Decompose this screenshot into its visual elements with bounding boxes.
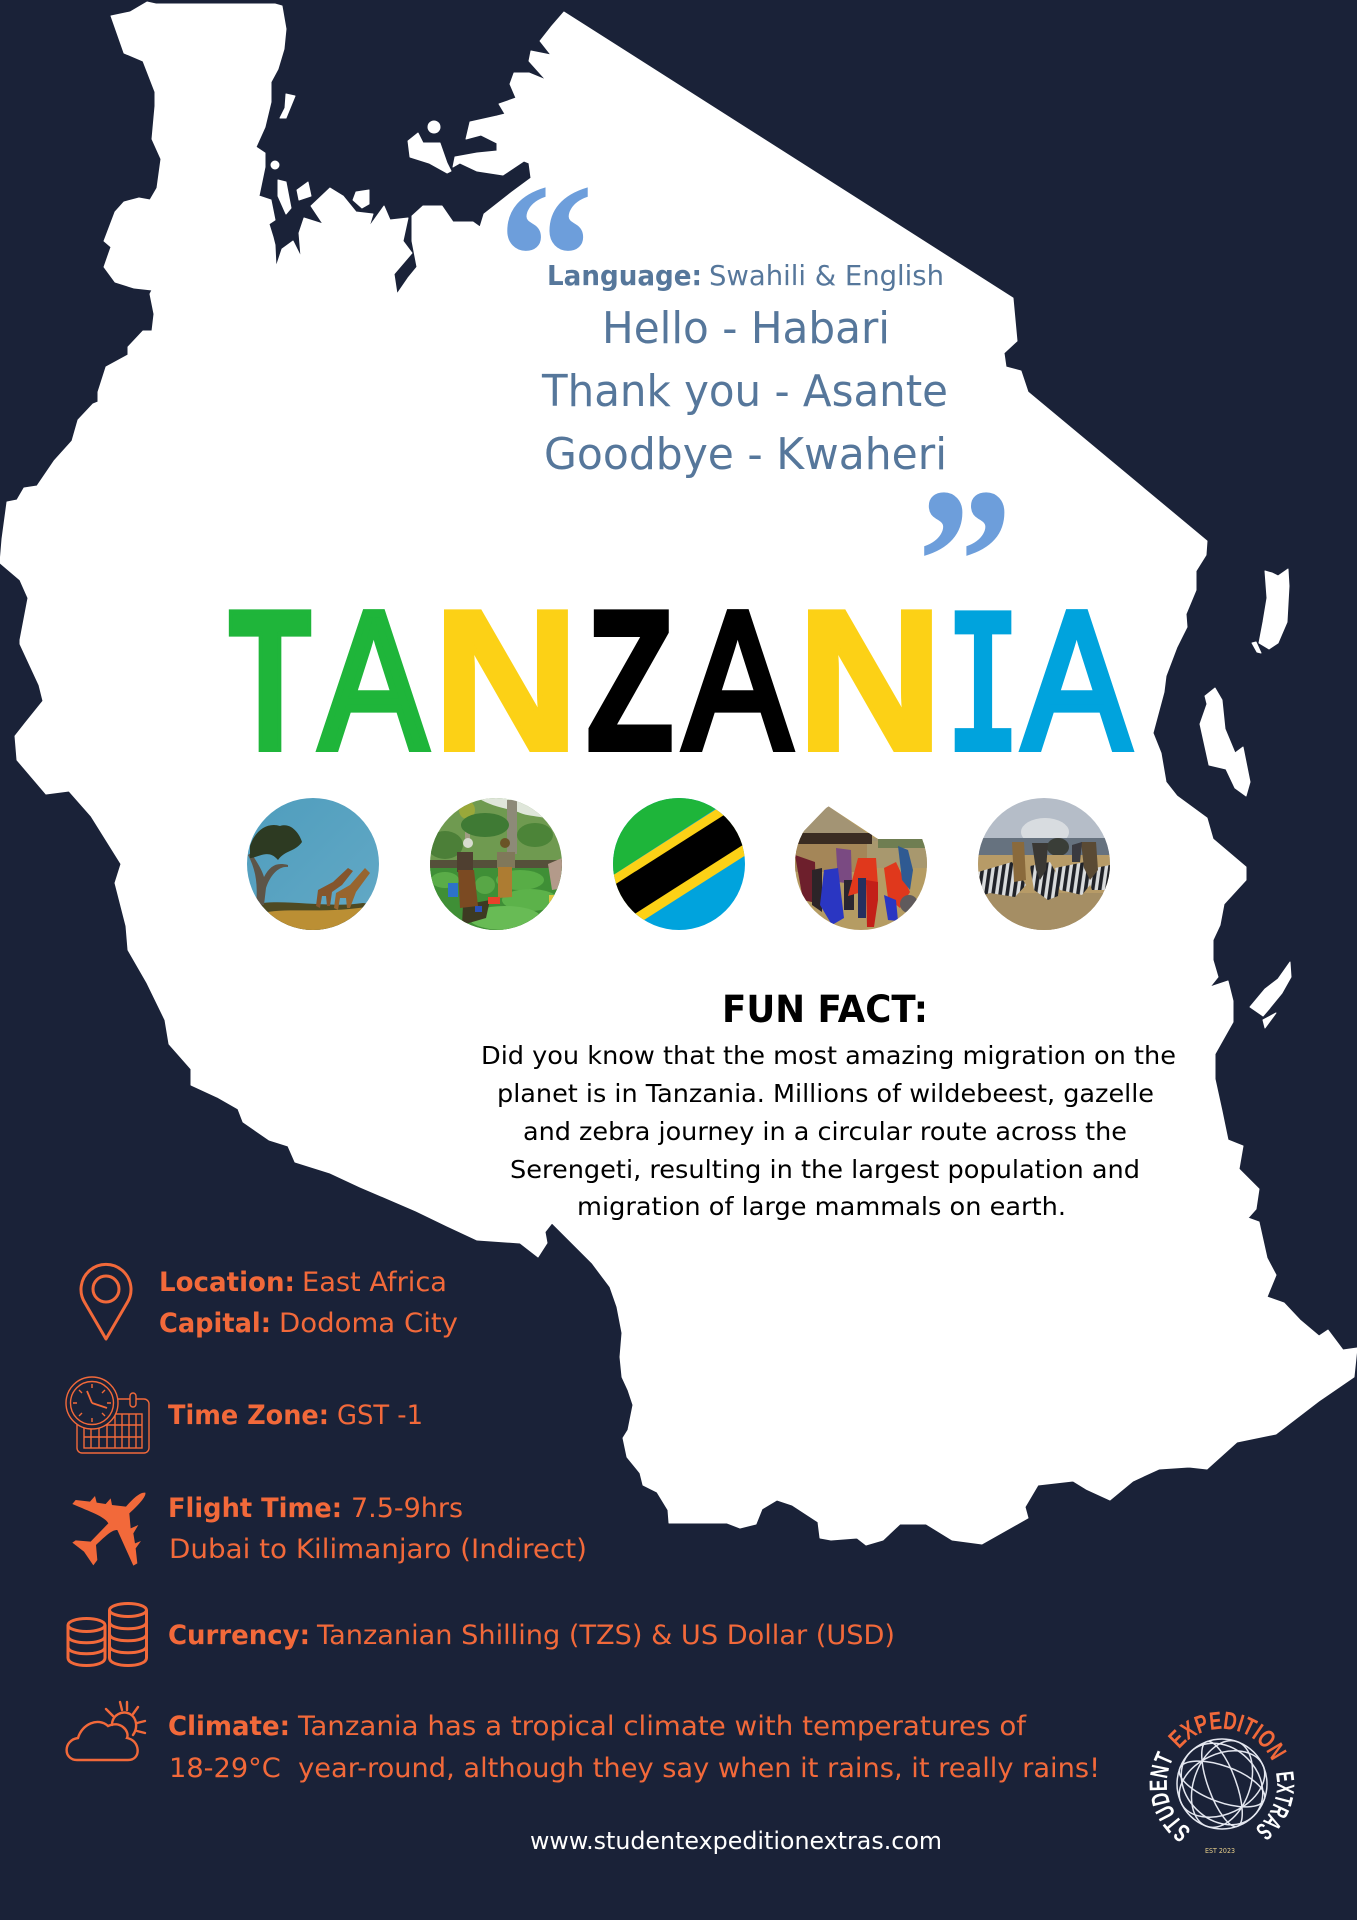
greeting phrases: Hello - Habari [602, 303, 890, 354]
language heading: Swahili & English [709, 259, 944, 292]
icon: airplane [72, 1493, 145, 1566]
time zone [168, 1400, 423, 1431]
photo: Maasai village [795, 806, 927, 930]
logo: Student Expedition Extras [1150, 1712, 1294, 1855]
logo globe [1165, 1727, 1279, 1841]
opening quotation mark: “ [498, 141, 594, 373]
icon: cloud and sun [67, 1702, 145, 1760]
flight time: Flight Time: [168, 1493, 342, 1524]
climate: 18-29°C year-round, although they say when it rains, it really rains! [169, 1753, 1100, 1784]
title: TANZANIA: A [1023, 571, 1130, 790]
climate: Climate: [168, 1711, 290, 1742]
language heading: Language: [547, 259, 702, 292]
currency: Tanzanian Shilling (TZS) & US Dollar (USD) [316, 1620, 895, 1651]
location and capital: East Africa [302, 1267, 447, 1298]
time zone: GST -1 [337, 1400, 423, 1431]
title: TANZANIA: I [945, 573, 1021, 817]
logo ring text [1150, 1712, 1294, 1842]
icon: clock and calendar [66, 1377, 149, 1453]
icon: coin stacks [68, 1604, 146, 1666]
climate: Tanzania has a tropical climate with temperatures of [297, 1711, 1028, 1742]
photo: zebras [978, 798, 1110, 930]
fun fact body: Serengeti, resulting in the largest population and [510, 1155, 1140, 1184]
location and capital [159, 1267, 458, 1339]
fun fact body: and zebra journey in a circular route across the [523, 1117, 1127, 1146]
photo: Tanzanian flag [613, 798, 745, 930]
logo est date: EST 2023 [1205, 1847, 1235, 1855]
location and capital: Capital: [159, 1308, 271, 1339]
title: TANZANIA: N [797, 570, 943, 792]
logo ring text: STUDENT [1150, 1750, 1190, 1842]
title: TANZANIA: A [320, 571, 427, 790]
climate [168, 1711, 1100, 1784]
logo ring text: EXTRAS [1256, 1772, 1294, 1840]
fun fact heading: FUN FACT: [722, 988, 928, 1031]
title: TANZANIA: T [229, 570, 311, 792]
title: TANZANIA: Z [586, 570, 674, 792]
language heading [547, 259, 944, 292]
photo: giraffes [247, 798, 379, 930]
flight time [168, 1493, 587, 1565]
time zone: Time Zone: [168, 1400, 329, 1431]
title: TANZANIA: A [684, 571, 791, 790]
currency: Currency: [168, 1620, 310, 1651]
fun fact body [481, 1041, 1176, 1221]
flight time: Dubai to Kilimanjaro (Indirect) [169, 1534, 587, 1565]
title: TANZANIA: N [433, 570, 579, 792]
greeting phrases: Thank you - Asante [541, 366, 948, 417]
logo ring text: EXPEDITION [1168, 1712, 1287, 1760]
website: www.studentexpeditionextras.com [530, 1827, 942, 1855]
fun fact body: migration of large mammals on earth. [577, 1192, 1066, 1221]
flight time: 7.5-9hrs [351, 1493, 463, 1524]
closing quotation mark: ” [917, 446, 1013, 678]
title: TANZANIA [229, 570, 1130, 817]
greeting phrases [541, 303, 948, 480]
fun fact body: Did you know that the most amazing migration on the [481, 1041, 1176, 1070]
greeting phrases: Goodbye - Kwaheri [544, 429, 947, 480]
fun fact body: planet is in Tanzania. Millions of wildebeest, gazelle [497, 1079, 1154, 1108]
icon: location pin [81, 1264, 131, 1339]
photo: farmers in field [427, 798, 564, 930]
location and capital: Dodoma City [279, 1308, 458, 1339]
location and capital: Location: [159, 1267, 295, 1298]
